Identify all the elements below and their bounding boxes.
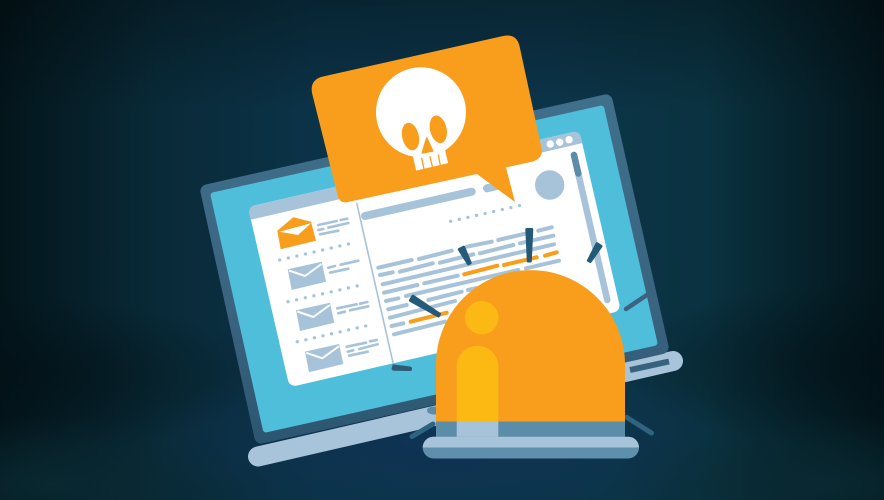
email window bbox=[248, 131, 621, 387]
highlighted orange lines bbox=[411, 252, 557, 322]
dotted line bbox=[451, 204, 528, 221]
siren bbox=[423, 270, 639, 458]
envelope 3 bbox=[305, 344, 343, 372]
dotted separator bbox=[280, 242, 357, 260]
speech bubble bbox=[312, 35, 542, 202]
band highlight bbox=[457, 422, 498, 438]
message header bbox=[365, 170, 564, 221]
window title bar bbox=[248, 131, 582, 220]
skull nose bbox=[422, 138, 433, 153]
window panel bbox=[248, 131, 621, 387]
skull jaw bbox=[413, 148, 448, 170]
dotted separator bbox=[288, 284, 366, 302]
window buttons bbox=[547, 136, 573, 148]
email preview lines bbox=[318, 219, 348, 234]
envelope: selected orange bbox=[277, 217, 316, 249]
message body text lines bbox=[378, 227, 559, 334]
envelope 2 bbox=[296, 303, 334, 331]
siren base bbox=[423, 437, 639, 458]
laptop base bbox=[258, 361, 673, 456]
email preview lines bbox=[328, 261, 358, 273]
spike on bezel bbox=[626, 294, 648, 309]
lower alert rays bbox=[412, 417, 652, 436]
dotted separator bbox=[297, 324, 374, 342]
scrollbar bbox=[574, 155, 607, 300]
siren band bbox=[436, 418, 625, 438]
bubble shape bbox=[312, 35, 542, 202]
skull tooth gaps bbox=[422, 155, 440, 170]
dome highlight dot bbox=[465, 301, 498, 334]
envelope 1 bbox=[288, 262, 326, 290]
hinge bump bbox=[427, 406, 441, 414]
laptop bezel bbox=[207, 101, 662, 437]
siren dome bbox=[436, 270, 625, 422]
alert rays bbox=[410, 230, 601, 316]
divider foot bbox=[392, 364, 412, 371]
email preview lines bbox=[347, 340, 378, 356]
laptop bbox=[207, 101, 673, 457]
sender bar bbox=[487, 184, 505, 188]
avatar bbox=[535, 170, 564, 200]
icon: skull bbox=[376, 67, 466, 170]
email preview lines bbox=[337, 302, 368, 313]
inbox list bbox=[277, 217, 378, 372]
pane divider bbox=[357, 203, 393, 364]
dome highlight bar bbox=[457, 346, 498, 422]
laptop screen bbox=[214, 109, 654, 429]
subject bar bbox=[365, 192, 472, 216]
skull eyes bbox=[399, 114, 450, 152]
